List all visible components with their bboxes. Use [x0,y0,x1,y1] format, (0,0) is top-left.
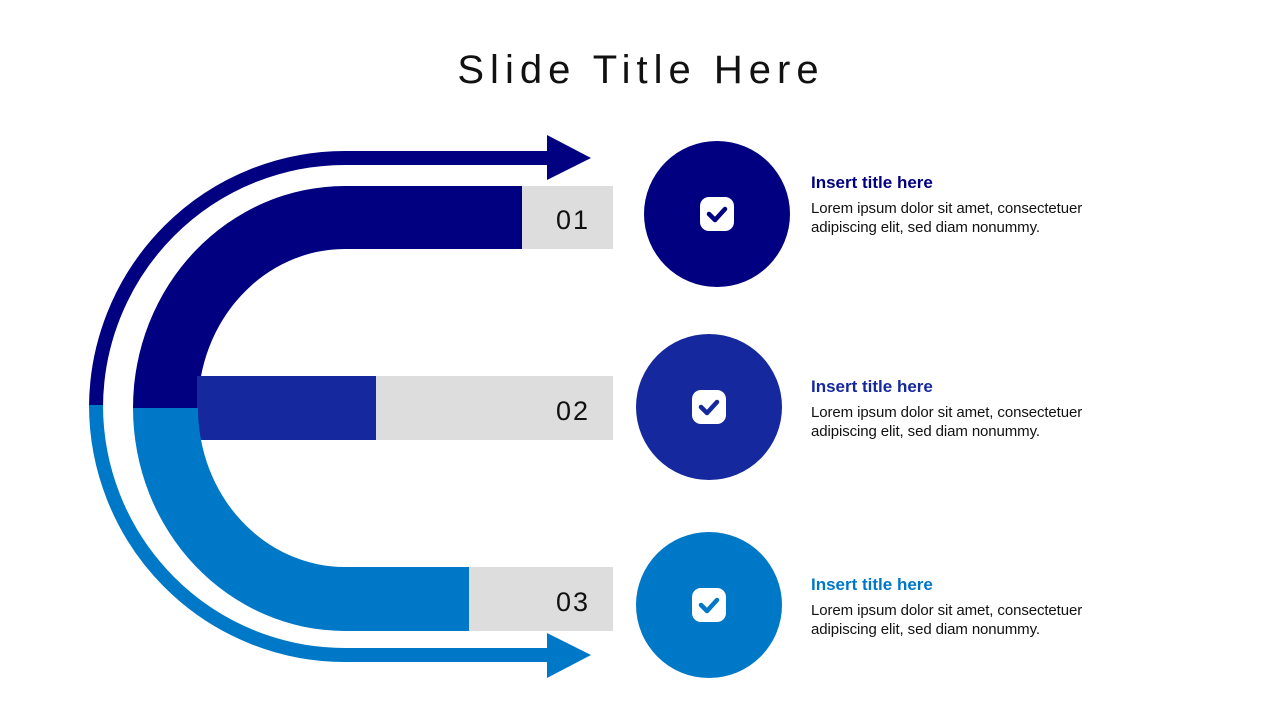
text block 1 [811,173,1082,236]
text block 2: Insert title here [811,377,933,396]
circle 2 with check icon [636,334,782,480]
text block 1: Insert title here [811,173,933,192]
title: Slide Title Here [457,48,825,92]
text block 2: Lorem ipsum dolor sit amet, consectetuer [811,404,1082,421]
text block 2 [811,377,1082,440]
band 01: 01 [556,205,590,235]
text block 3: Insert title here [811,575,933,594]
band 01 [133,186,613,408]
band 03 [133,408,613,631]
band 02 [197,376,613,440]
text block 1: adipiscing elit, sed diam nonummy. [811,219,1040,236]
band 03: 03 [556,587,590,617]
text block 3: Lorem ipsum dolor sit amet, consectetuer [811,602,1082,619]
text block 3 [811,575,1082,638]
text block 3: adipiscing elit, sed diam nonummy. [811,621,1040,638]
band 02: 02 [556,396,590,426]
circle 1 with check icon [644,141,790,287]
bottom thin arrow [96,405,591,678]
text block 1: Lorem ipsum dolor sit amet, consectetuer [811,200,1082,217]
text block 2: adipiscing elit, sed diam nonummy. [811,423,1040,440]
top thin arrow [96,135,591,408]
circle 3 with check icon [636,532,782,678]
